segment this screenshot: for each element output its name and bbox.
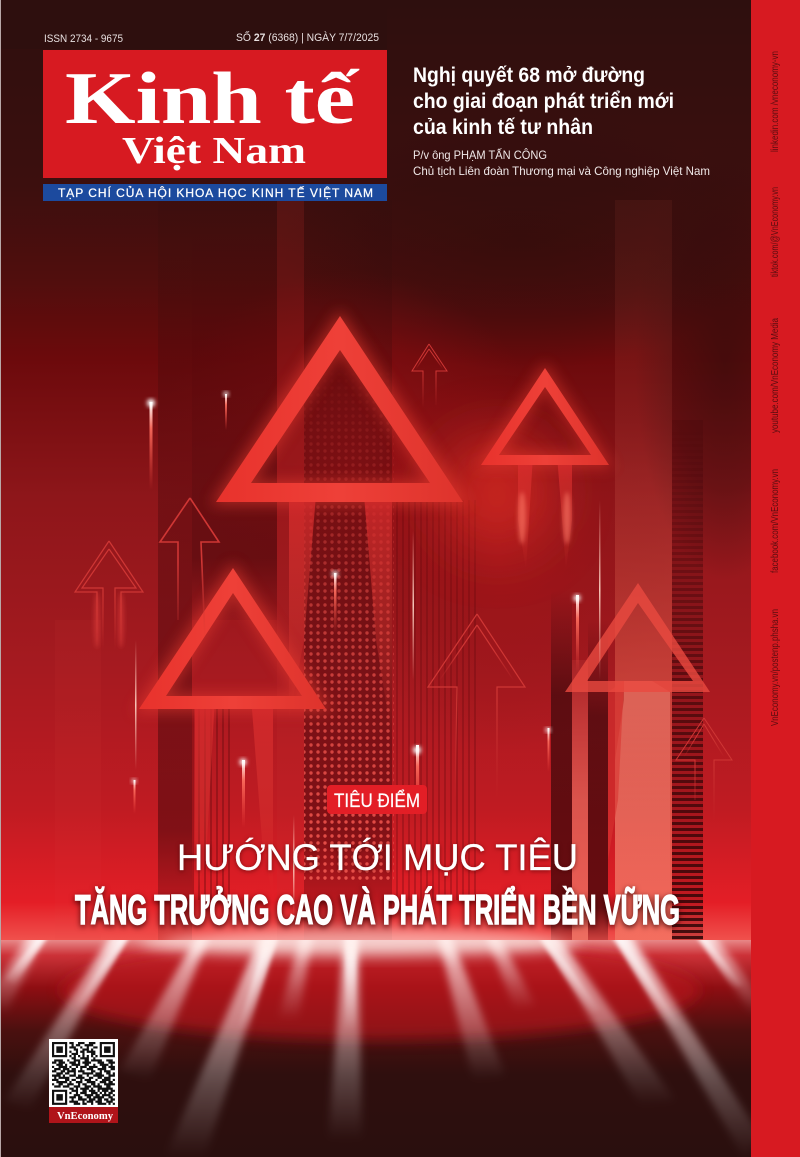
arrow outline: middle right (427, 614, 526, 770)
top left dark band (1, 0, 387, 49)
arrow outline: small upper left (160, 498, 219, 640)
vertical light and dark strips (158, 200, 703, 940)
arrow outline: double left (75, 541, 143, 650)
section badge: TIÊU ĐIỂM (334, 790, 420, 812)
issn: ISSN 2734 - 9675 (44, 33, 123, 45)
left edge hairline (0, 0, 1, 1157)
arrow: lower left (134, 560, 334, 860)
qr label: VnEconomy (57, 1110, 113, 1122)
arrow: lower right translucent (565, 583, 710, 870)
section badge (327, 785, 427, 814)
masthead: Việt Nam: Việt Nam (122, 130, 306, 172)
masthead: Kinh tế: Kinh tế (65, 58, 360, 140)
arrow: upper right (476, 362, 614, 570)
qr code (49, 1039, 118, 1107)
main headline line one: HƯỚNG TỚI MỤC TIÊU (177, 837, 578, 878)
social links sidebar: youtube.com/VnEconomy Media (769, 318, 781, 433)
qr label (49, 1107, 118, 1123)
tagline bar: TẠP CHÍ CỦA HỘI KHOA HỌC KINH TẾ VIỆT NAM (58, 185, 373, 200)
social links sidebar (769, 51, 781, 726)
issue number and date: SỐ 27 (6368) | NGÀY 7/7/2025 (236, 30, 379, 44)
artwork: rising arrows (1, 0, 751, 940)
light rays floor (0, 925, 762, 1157)
masthead logo (43, 50, 387, 178)
interview byline (413, 147, 710, 178)
bright ray tips (6, 936, 742, 1030)
arrow outline: tiny top (412, 344, 447, 408)
horizon bleed above floor (162, 920, 568, 940)
light sparks and beams (132, 392, 601, 915)
social links sidebar: VnEconomy.vn/postenp.phsha.vn (769, 609, 781, 726)
social links sidebar: linkedin.com /vneconomy-vn (769, 51, 781, 152)
central glow (442, 437, 552, 547)
cover story headline (413, 64, 674, 139)
cover story headline: của kinh tế tư nhân (413, 116, 593, 139)
interview byline: P/v ông PHẠM TẤN CÔNG (413, 147, 547, 162)
qr modules (52, 1042, 115, 1105)
arrow: large center (210, 310, 470, 740)
interview byline: Chủ tịch Liên đoàn Thương mại và Công nghiệp Việt Nam (413, 164, 710, 178)
arrow outline: far right (675, 718, 733, 803)
social links sidebar: tiktok.com/@VnEconomy.vn (769, 187, 781, 277)
social links sidebar: facebook.com/VnEconomy.vn (769, 469, 781, 573)
cover story headline: Nghị quyết 68 mở đường (413, 64, 645, 87)
cover story headline: cho giai đoạn phát triển mới (413, 90, 674, 113)
dotted and striped textures (192, 360, 703, 940)
